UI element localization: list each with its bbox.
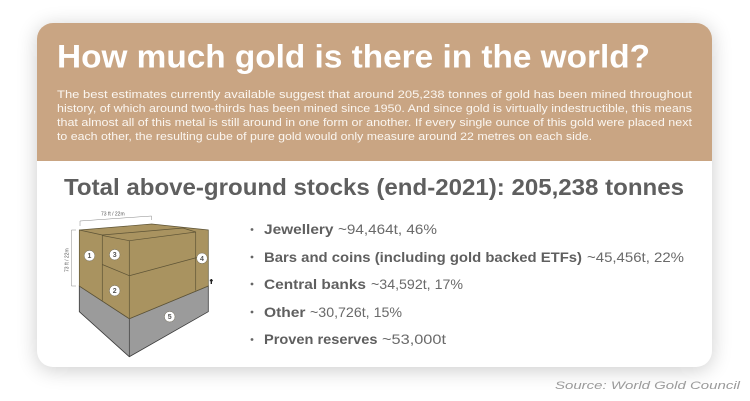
grey base: proven reserves: [79, 286, 208, 357]
gold cube: [79, 224, 208, 319]
header panel: [37, 23, 712, 161]
item: other: ~30,726t, 15%: [310, 305, 402, 320]
label 1: 1: [88, 253, 92, 260]
title: How much gold is there in the world?: [57, 38, 650, 74]
intro paragraph: The best estimates currently available suggest that around 205,238 tonnes of gold has been mined throughout: [57, 89, 692, 101]
item: other: [251, 305, 402, 320]
height dimension: [64, 230, 76, 286]
item: central banks: ~34,592t, 17%: [371, 277, 463, 292]
source note: Source: World Gold Council: [555, 380, 741, 392]
intro paragraph: that almost all of this metal is still around in one form or another. If every single ounce of this gold were placed next: [57, 117, 692, 129]
label 3: [109, 249, 120, 260]
item: jewellery: [251, 222, 437, 237]
label 4: [197, 253, 207, 264]
item: jewellery: ~94,464t, 46%: [338, 222, 437, 237]
width dimension: 73 ft / 22m: [101, 212, 125, 218]
item: jewellery: Jewellery: [264, 222, 334, 237]
intro paragraph: to each other, the resulting cube of pure gold would only measure around 22 metres on each side.: [57, 131, 592, 143]
intro paragraph: [57, 89, 692, 143]
label 2: 2: [113, 288, 117, 295]
label 3: 3: [113, 252, 117, 259]
label 5: [164, 311, 175, 322]
label 1: [84, 250, 95, 261]
breakdown list: [251, 222, 684, 347]
card background: [37, 23, 712, 367]
width dimension: [80, 212, 152, 226]
item: proven reserves: Proven reserves: [264, 332, 378, 347]
person scale icon: [210, 279, 213, 284]
item: other: Other: [264, 305, 306, 320]
item: central banks: Central banks: [264, 277, 366, 292]
item: bars and coins: Bars and coins (including gold backed ETFs): [264, 250, 582, 265]
label 5: 5: [168, 314, 172, 321]
label 4: 4: [200, 256, 204, 263]
item: bars and coins: ~45,456t, 22%: [587, 250, 684, 265]
item: central banks: [251, 277, 463, 292]
item: bars and coins: [251, 250, 684, 265]
cube diagram: [64, 212, 213, 357]
item: proven reserves: ~53,000t: [382, 332, 446, 347]
section heading: Total above-ground stocks (end-2021): 205,238 tonnes: [64, 174, 684, 200]
label 2: [109, 285, 120, 296]
item: proven reserves: [251, 332, 446, 347]
intro paragraph: history, of which around two-thirds has been mined since 1950. And since gold is virtually indestructible, this means: [57, 103, 692, 115]
height dimension: 73 ft / 22m: [64, 248, 70, 272]
